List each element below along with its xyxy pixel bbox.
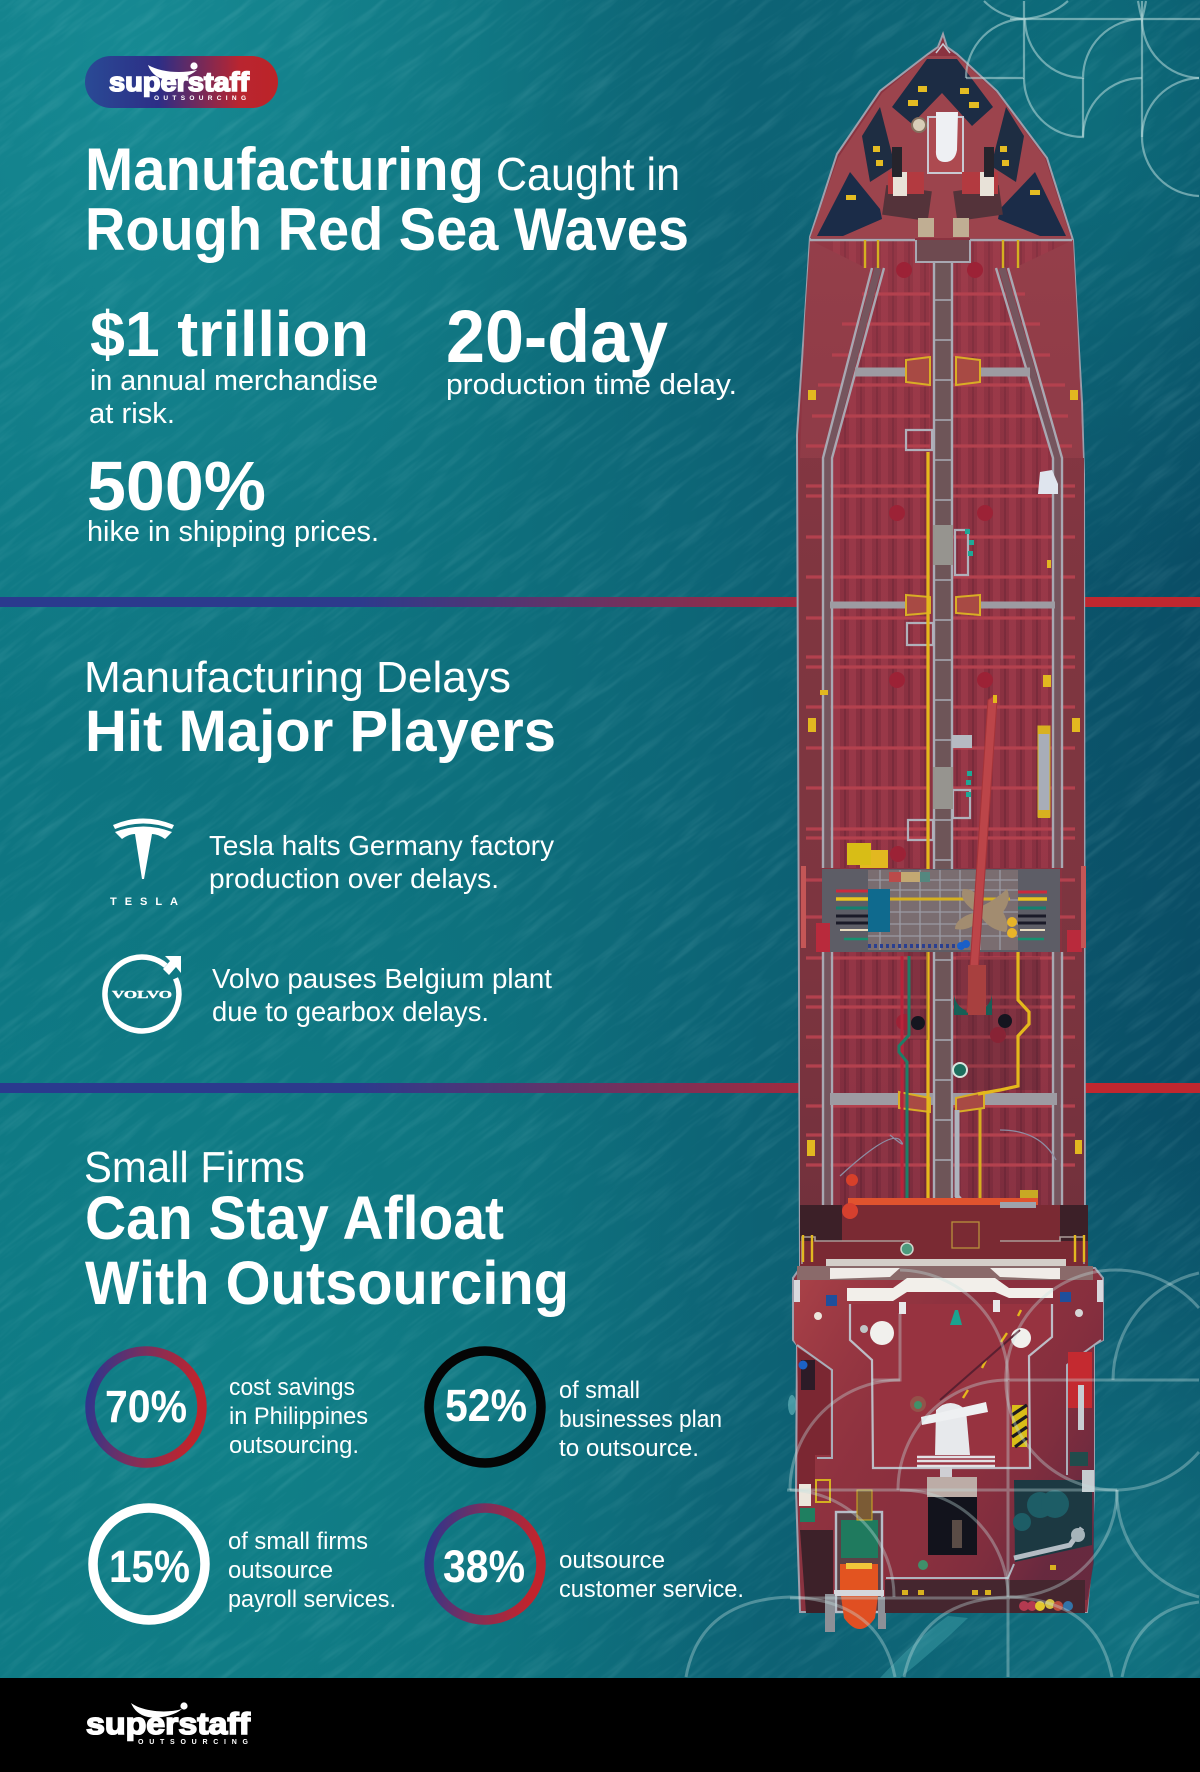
deck transverse ribs: [806, 294, 1075, 1165]
text: 70%: [229, 1374, 368, 1459]
text: 52%: [559, 1377, 722, 1462]
footer logo: superstaff: [86, 1706, 251, 1741]
left lower dark area: [800, 1530, 833, 1613]
heading: manufacturing delays: Hit Major Players: [85, 699, 556, 764]
title: Manufacturing: [85, 136, 484, 203]
text: 38%: outsource: [559, 1547, 665, 1574]
stat: 500%: 500%: [87, 447, 266, 525]
right bay: [1014, 1480, 1092, 1562]
stat ring: 52%: 52%: [445, 1380, 527, 1431]
footer logo: OUTSOURCING: [138, 1739, 249, 1746]
stat: $1 trillion: in annual merchandise: [90, 365, 378, 397]
stat: 20-day: [446, 295, 737, 401]
fore deck bulkhead rail: [810, 239, 1072, 241]
stat: 20-day: production time delay.: [446, 369, 737, 401]
stat: $1 trillion: [89, 298, 378, 430]
heading: small firms: Small Firms: [84, 1143, 305, 1192]
title: Caught in: [496, 148, 680, 200]
decorative pattern: top right: [966, 1, 1200, 196]
logo pill: superstaff: [109, 67, 250, 97]
stat: $1 trillion: $1 trillion: [90, 298, 369, 370]
text: 70%: cost savings: [229, 1374, 355, 1401]
decorative pattern: bottom right: [686, 1270, 1199, 1677]
midship manifold platform: [801, 866, 1086, 952]
text: tesla: [209, 830, 554, 894]
stat: 500%: [87, 447, 379, 548]
heading: small firms: [84, 1143, 569, 1317]
heading: manufacturing delays: Manufacturing Delays: [84, 653, 511, 702]
text: tesla: production over delays.: [209, 863, 499, 894]
hatch: [927, 1477, 977, 1497]
heading: small firms: With Outsourcing: [85, 1249, 569, 1317]
yellow fittings: [807, 390, 1082, 1156]
text: 15%: of small firms: [228, 1528, 368, 1555]
title: [85, 136, 689, 263]
text: 52%: of small: [559, 1377, 640, 1404]
stat: 500%: hike in shipping prices.: [87, 516, 379, 548]
stat ring: 15%: [93, 1508, 205, 1620]
small walkway platforms: [906, 430, 970, 840]
divider band 1: [0, 597, 1200, 607]
footer bar: [0, 1678, 1200, 1772]
light storage strip: [1038, 726, 1050, 817]
heading: small firms: Can Stay Afloat: [85, 1184, 504, 1252]
wake: [880, 1616, 968, 1678]
text: 38%: [559, 1547, 744, 1603]
valve caps: [889, 262, 1006, 1043]
long yellow pipe: [926, 452, 930, 1200]
icon: volvo logo: [105, 956, 181, 1031]
crossing walkways: [855, 368, 1030, 376]
mast: [935, 1403, 970, 1455]
stat ring: 38%: 38%: [443, 1541, 525, 1592]
text: tesla: Tesla halts Germany factory: [209, 830, 554, 861]
side walkways: [827, 268, 1057, 1207]
text: 52%: to outsource.: [559, 1435, 699, 1462]
icon: tesla logo: TESLA: [110, 896, 178, 908]
teal valves: [965, 529, 974, 797]
text: 38%: customer service.: [559, 1576, 744, 1603]
stat ring: 70%: [90, 1351, 202, 1463]
text: volvo: [212, 963, 552, 1027]
logo pill: [85, 56, 278, 108]
accommodation block: [794, 1266, 1103, 1632]
text: 15%: outsource: [228, 1557, 333, 1584]
title: Rough Red Sea Waves: [85, 196, 689, 263]
hull: [793, 34, 1103, 1612]
stat ring: 38%: [429, 1508, 541, 1620]
stern strip: [885, 1580, 1085, 1613]
white cover on deck: [1038, 470, 1058, 494]
stat ring: 15%: 15%: [109, 1541, 190, 1592]
main deck panels: [798, 240, 1084, 1210]
text: 52%: businesses plan: [559, 1406, 722, 1433]
text: 15%: payroll services.: [228, 1586, 396, 1613]
lifeboat cradle: [836, 1512, 882, 1612]
central catwalk: [933, 240, 953, 1210]
icon: tesla logo: [110, 818, 178, 908]
icon: volvo logo: VOLVO: [112, 990, 172, 1001]
aft pipes and crane: [840, 695, 1056, 1206]
text: 70%: outsourcing.: [229, 1432, 359, 1459]
stat ring: 70%: 70%: [105, 1381, 187, 1432]
aft deck: [800, 1198, 1088, 1271]
heading: manufacturing delays: [84, 653, 556, 764]
stat ring: 52%: [429, 1351, 541, 1463]
text: volvo: due to gearbox delays.: [212, 996, 489, 1027]
stat: $1 trillion: at risk.: [89, 398, 175, 430]
left passage: [798, 1348, 830, 1490]
divider band 2: [0, 1083, 1200, 1093]
ship seen from above: [788, 34, 1103, 1678]
fore deck: [810, 44, 1071, 238]
text: 15%: [228, 1528, 396, 1613]
text: volvo: Volvo pauses Belgium plant: [212, 963, 552, 994]
logo pill: OUTSOURCING: [154, 95, 246, 102]
text: 70%: in Philippines: [229, 1403, 368, 1430]
stat: 20-day: 20-day: [446, 295, 668, 378]
